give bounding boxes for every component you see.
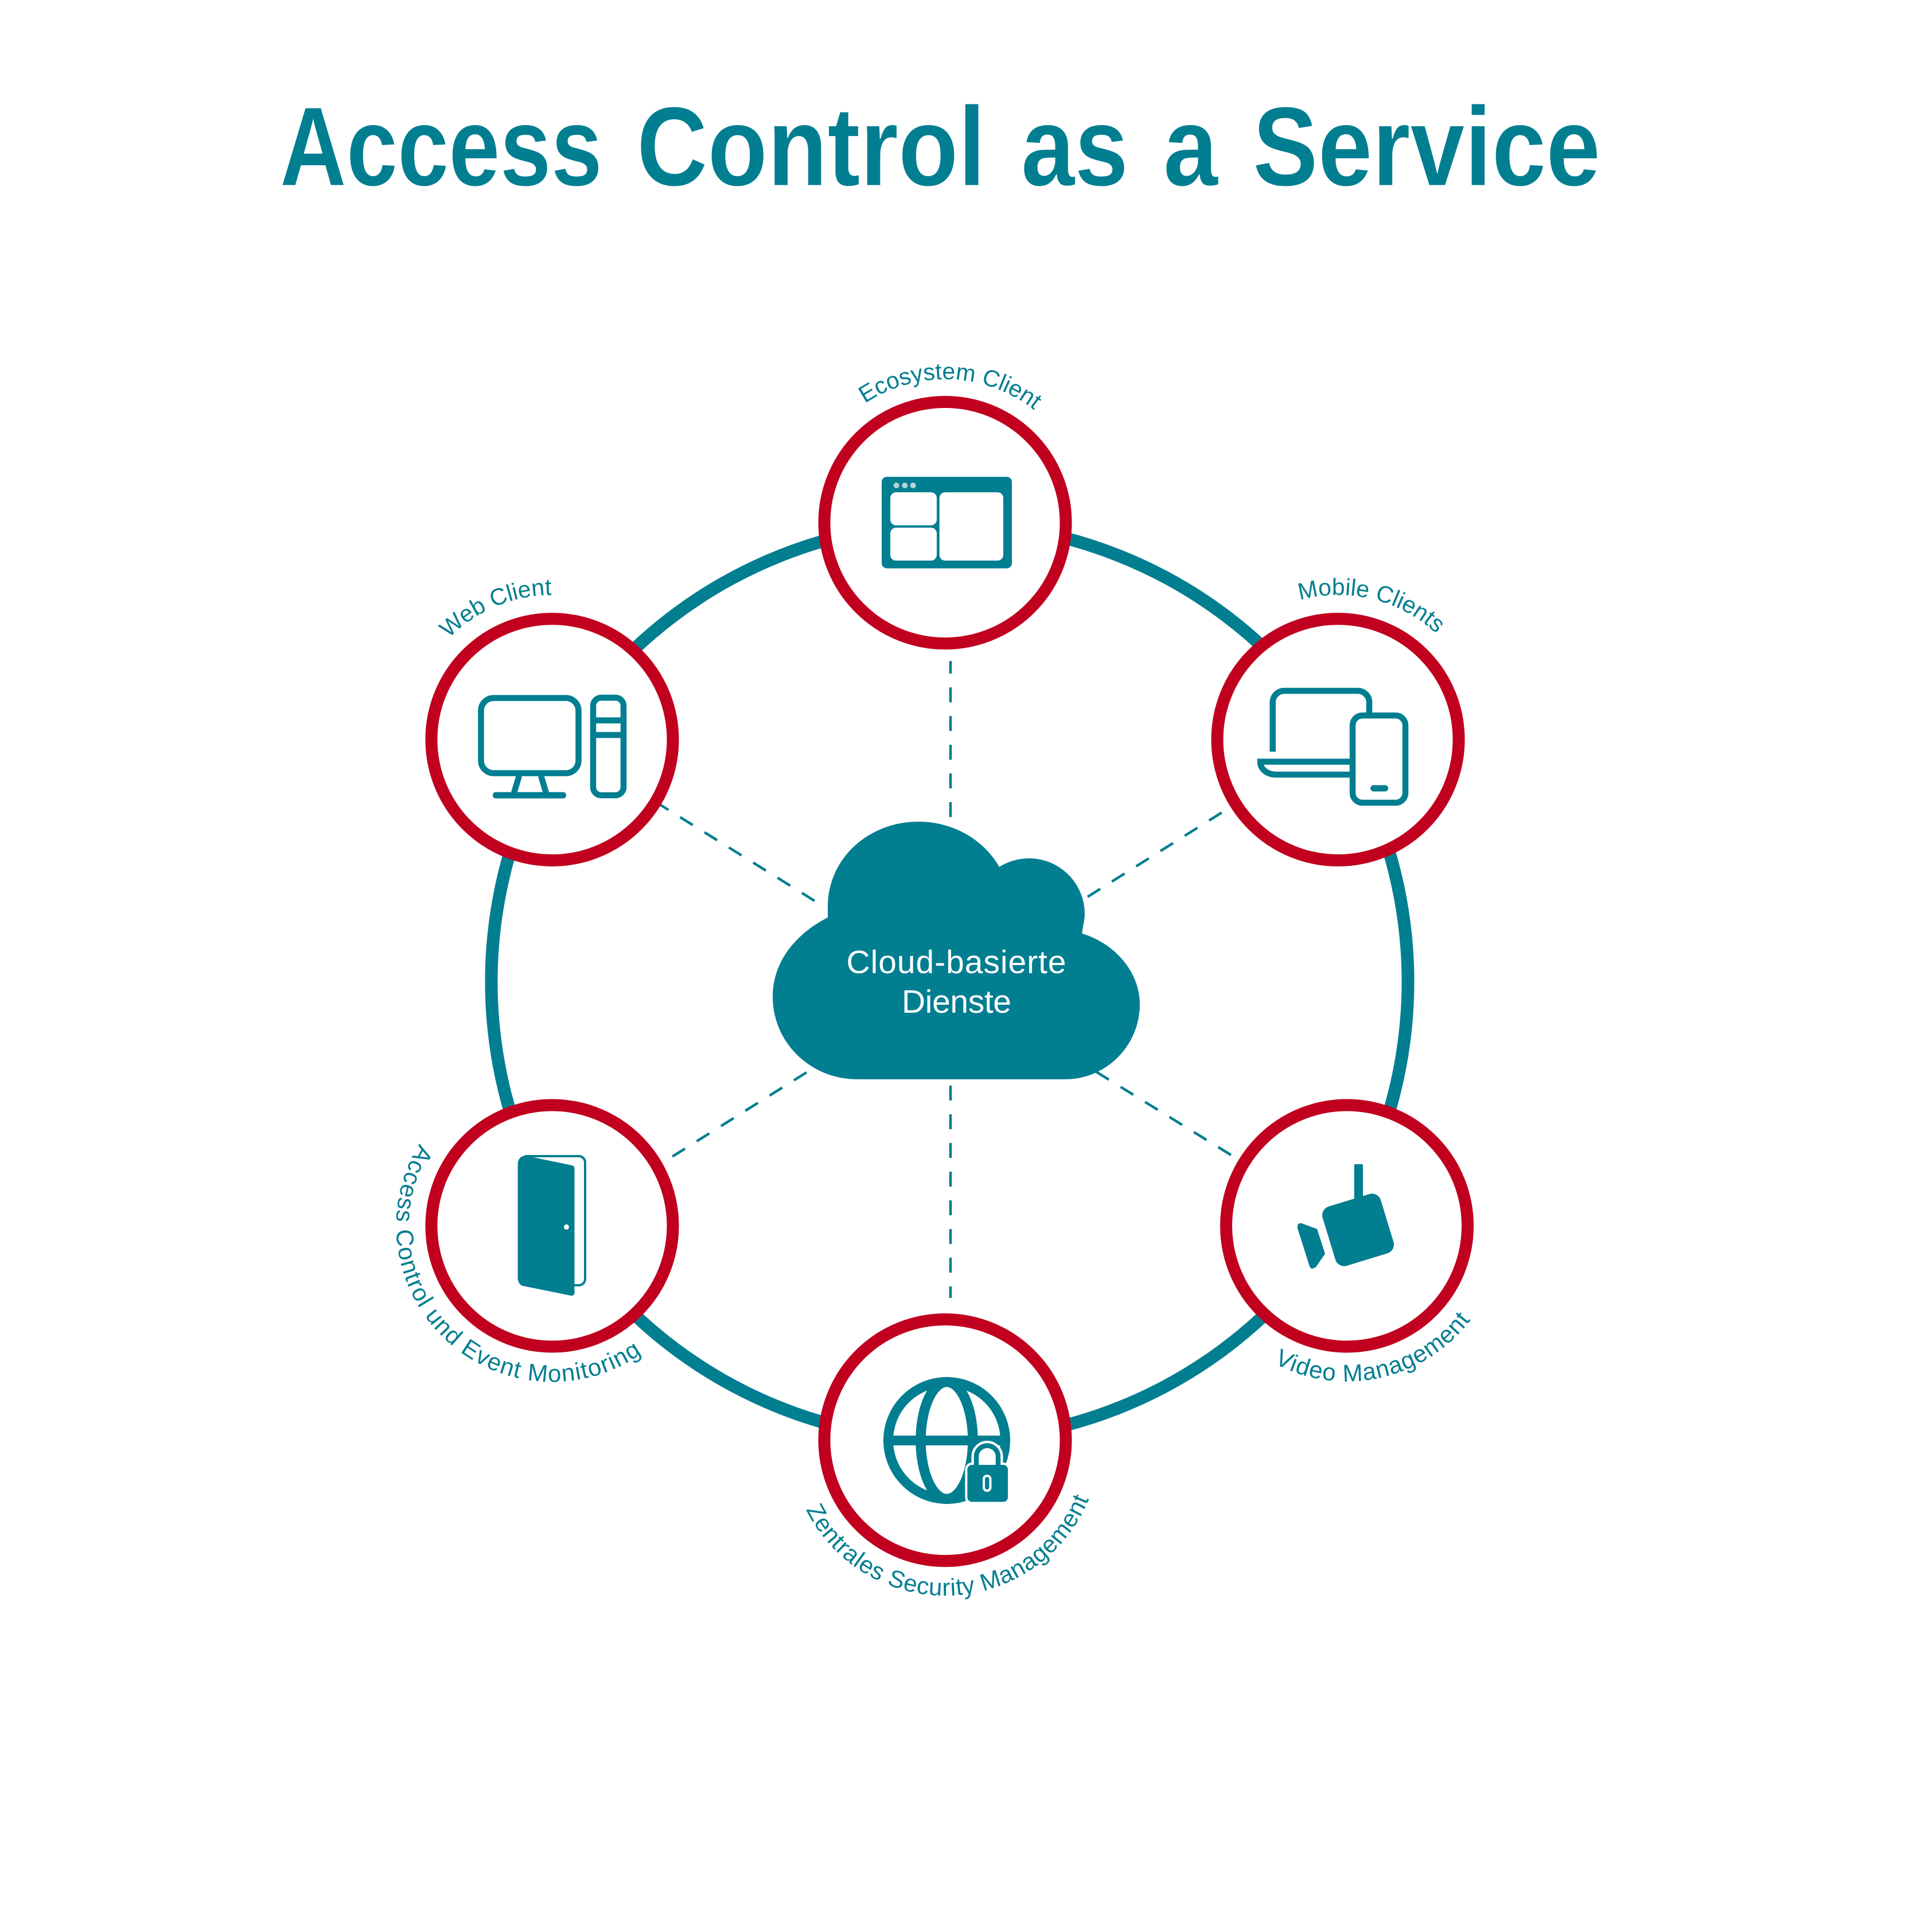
- title: Access: [280, 84, 602, 209]
- panel: Mobile Clients: [1212, 578, 1465, 866]
- title: Service: [1253, 84, 1600, 209]
- cloud label line 1: Cloud-basierte: [847, 944, 1066, 981]
- cloud label line 2: Dienste: [902, 983, 1011, 1020]
- label: Zentrales Security Management: Zentrales Security Management: [806, 1494, 1089, 1600]
- label: Video Management: Video Management: [1280, 1312, 1471, 1382]
- icon: dashboard window: [882, 477, 1012, 568]
- outer ring connecting the services: [491, 523, 1408, 1440]
- icon: desktop computer: [481, 698, 624, 799]
- label: Access Control und Event Monitoring: Access Control und Event Monitoring: [396, 1144, 641, 1382]
- panel: Web Client: [426, 580, 679, 866]
- title: Control: [637, 84, 986, 209]
- title: as: [1021, 84, 1128, 209]
- label: Mobile Clients: Mobile Clients: [1298, 578, 1443, 632]
- panel: Access Control und Event Monitoring: [396, 1099, 679, 1382]
- title: [280, 84, 1600, 209]
- icon: security camera: [1298, 1164, 1396, 1269]
- dashed connectors from cloud to services: [655, 661, 1231, 1298]
- title: a: [1163, 84, 1219, 209]
- panel: Ecosystem Client: [818, 364, 1072, 650]
- icon: laptop and phone: [1260, 691, 1405, 803]
- icon: globe with padlock: [888, 1382, 1008, 1502]
- icon: open door: [518, 1156, 585, 1296]
- label: Ecosystem Client: Ecosystem Client: [858, 364, 1042, 410]
- panel: Zentrales Security Management: [806, 1313, 1089, 1600]
- central cloud: [773, 822, 1140, 1079]
- panel: Video Management: [1220, 1099, 1474, 1382]
- label: Web Client: Web Client: [438, 580, 552, 635]
